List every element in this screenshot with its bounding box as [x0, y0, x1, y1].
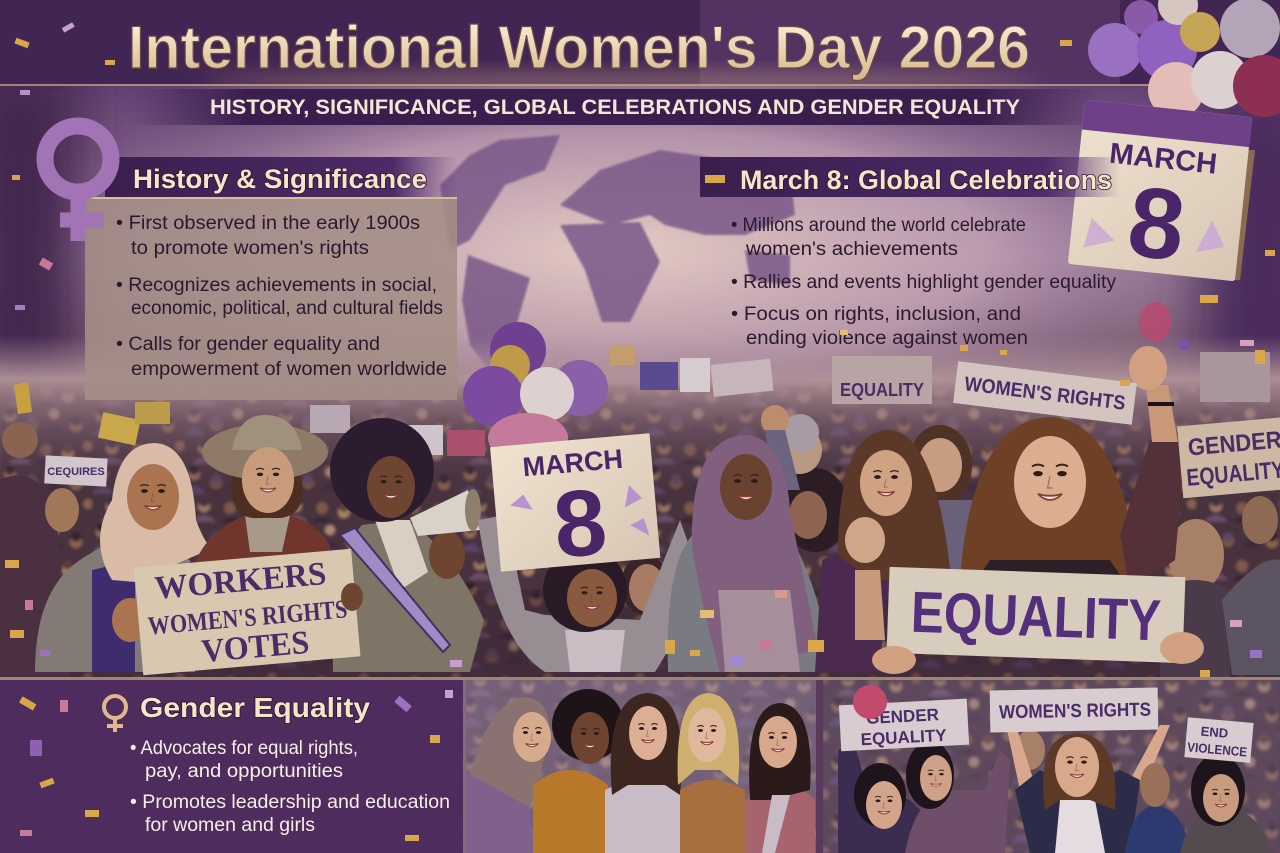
heading ribbon: celebrations: March 8: Global Celebrations — [740, 165, 1112, 195]
panel: history and significance — [85, 157, 457, 400]
history text: empowerment of women worldwide — [131, 359, 447, 380]
sign: women's rights — [953, 361, 1137, 425]
bottom strip background — [0, 677, 1280, 853]
history text — [116, 213, 447, 380]
woman 2 with hat — [196, 415, 330, 580]
megaphone — [410, 490, 480, 536]
history text: • Calls for gender equality and — [116, 334, 380, 355]
gender equality text: • Advocates for equal rights, — [130, 738, 358, 759]
woman with raised fist — [815, 430, 960, 672]
background banners — [14, 345, 1270, 487]
hands on equality sign — [872, 632, 1204, 674]
sign: March 8 centre: 8 — [549, 469, 611, 578]
celebrations text — [731, 215, 1117, 349]
calendar: March 8: 8 — [1123, 165, 1190, 282]
calendar: March 8 — [1067, 100, 1255, 288]
sign: gender equality small: EQUALITY — [860, 726, 948, 749]
sign: equality — [887, 567, 1185, 663]
woman with equality sign — [960, 346, 1186, 591]
balloon: red — [853, 685, 887, 719]
sign: gender equality small: GENDER — [866, 705, 939, 728]
sign: end violence: VIOLENCE — [1187, 739, 1248, 760]
sign: March 8 centre: MARCH — [521, 444, 624, 482]
balloons centre — [463, 322, 608, 463]
subtitle ribbon — [130, 89, 1100, 125]
heading ribbon: celebrations — [700, 157, 1120, 197]
panel: global celebrations — [700, 157, 1120, 349]
hand on workers sign — [341, 583, 363, 611]
gender equality text: for women and girls — [145, 815, 315, 836]
calendar: March 8: MARCH — [1108, 138, 1219, 181]
woman 1 with headscarf — [35, 443, 213, 672]
woman in hijab smiling — [668, 435, 830, 672]
photo: rally — [838, 685, 1272, 853]
sign: gender equality — [1177, 417, 1280, 498]
celebrations text: • Millions around the world celebrate — [731, 215, 1026, 236]
centre woman — [478, 515, 705, 672]
sign: workers: WORKERS — [153, 556, 328, 607]
title: International Women's Day 2026 — [128, 14, 1030, 81]
sign: March 8 centre — [490, 433, 661, 583]
sign: women's rights small: WOMEN'S RIGHTS — [999, 700, 1151, 723]
celebrations text: • Focus on rights, inclusion, and — [731, 304, 1021, 325]
celebrations text: • Rallies and events highlight gender equality — [731, 272, 1117, 293]
sign: gender equality small — [839, 699, 969, 751]
heading ribbon: history — [105, 157, 457, 197]
history text: • Recognizes achievements in social, — [116, 275, 437, 296]
celebrations text: women's achievements — [745, 239, 958, 260]
sign: end violence: END — [1200, 723, 1229, 741]
sign: workers: VOTES — [200, 625, 311, 670]
sign: women's rights small — [990, 688, 1158, 732]
heading ribbon: history: History & Significance — [133, 164, 427, 194]
icon: female symbol small — [104, 696, 126, 732]
history text: to promote women's rights — [131, 238, 369, 259]
sign: workers — [134, 549, 360, 675]
woman 3 with megaphone — [330, 418, 484, 672]
gender equality text — [130, 738, 450, 836]
gender equality text: • Promotes leadership and education — [130, 792, 450, 813]
gender equality text: pay, and opportunities — [145, 761, 343, 782]
celebrations text: ending violence against women — [746, 328, 1028, 349]
background crowd figures — [0, 405, 1280, 680]
crowd — [0, 335, 1280, 680]
balloons top right — [1088, 0, 1280, 118]
history text: • First observed in the early 1900s — [116, 213, 420, 234]
heading: gender equality: Gender Equality — [140, 692, 370, 723]
background banners: CEQUIRES — [47, 466, 105, 478]
history text: economic, political, and cultural fields — [131, 298, 443, 319]
sign: equality: EQUALITY — [910, 580, 1162, 653]
sign: end violence — [1184, 717, 1254, 763]
sign: women's rights: WOMEN'S RIGHTS — [963, 373, 1127, 415]
world map — [440, 135, 795, 372]
photo: group of five women — [466, 689, 815, 853]
sign: equality background: EQUALITY — [840, 380, 924, 400]
subtitle ribbon: HISTORY, SIGNIFICANCE, GLOBAL CELEBRATIONS AND GENDER EQUALITY — [210, 96, 1020, 119]
sign: workers: WOMEN'S RIGHTS — [147, 594, 349, 641]
sash — [340, 528, 450, 652]
panel: gender equality — [104, 692, 450, 836]
icon: female symbol — [45, 126, 111, 241]
sign: equality background — [832, 356, 932, 404]
